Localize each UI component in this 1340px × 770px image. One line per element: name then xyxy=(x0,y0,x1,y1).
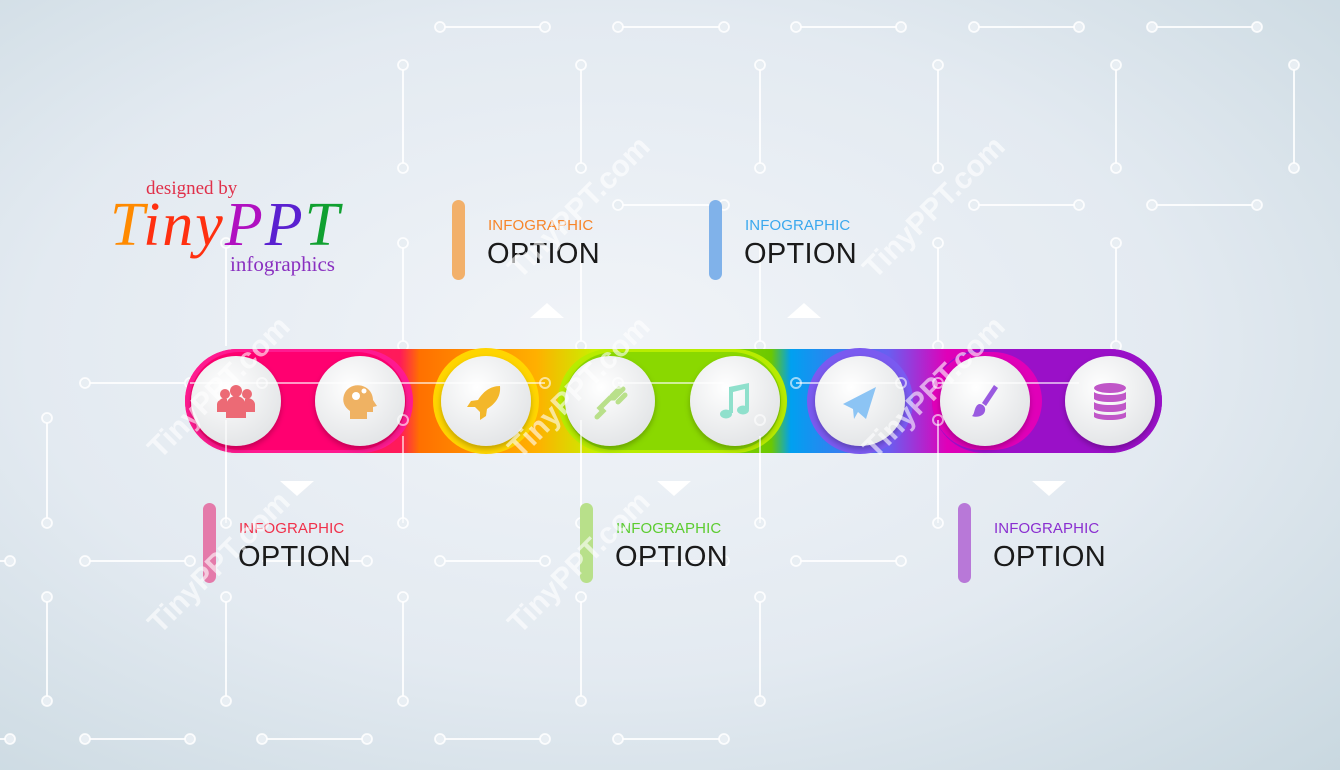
option 3 (bottom pink): INFOGRAPHIC xyxy=(239,520,344,537)
icon: people xyxy=(191,356,281,446)
option 2 (top blue): INFOGRAPHIC xyxy=(745,217,850,234)
option 5 (bottom purple) xyxy=(958,503,1106,583)
option 2 (top blue): OPTION xyxy=(744,238,857,270)
option 4 (bottom green): INFOGRAPHIC xyxy=(616,520,721,537)
icon: rocket xyxy=(441,356,531,446)
option 1 (top orange): INFOGRAPHIC xyxy=(488,217,593,234)
option 3 (bottom pink) xyxy=(203,503,351,583)
watermarks: TinyPPT.com xyxy=(857,310,1012,465)
option 4 (bottom green) xyxy=(580,503,728,583)
option 2 (top blue) xyxy=(709,200,857,280)
option 5 (bottom purple): INFOGRAPHIC xyxy=(994,520,1099,537)
icon: music xyxy=(690,356,780,446)
option 3 (bottom pink): OPTION xyxy=(238,541,351,573)
option 4 (bottom green): OPTION xyxy=(615,541,728,573)
logo: designed by TinyPPT infographics: designed by xyxy=(146,178,237,199)
icon: database xyxy=(1065,356,1155,446)
logo: designed by TinyPPT infographics: infographics xyxy=(230,252,335,276)
icon: plug xyxy=(565,356,655,446)
watermarks: TinyPPT.com xyxy=(502,310,657,465)
icon: paper plane xyxy=(815,356,905,446)
watermarks: TinyPPT.com xyxy=(142,485,297,640)
watermarks: TinyPPT.com xyxy=(142,310,297,465)
watermarks: TinyPPT.com xyxy=(502,130,657,285)
watermarks: TinyPPT.com xyxy=(502,485,657,640)
icon: paint brush xyxy=(940,356,1030,446)
logo: designed by TinyPPT infographics xyxy=(110,178,343,276)
watermarks: TinyPPT.com xyxy=(857,130,1012,285)
icon: head with gears xyxy=(315,356,405,446)
logo: designed by TinyPPT infographics: TinyPPT xyxy=(110,191,341,259)
option 1 (top orange): OPTION xyxy=(487,238,600,270)
option 1 (top orange) xyxy=(452,200,600,280)
option 5 (bottom purple): OPTION xyxy=(993,541,1106,573)
